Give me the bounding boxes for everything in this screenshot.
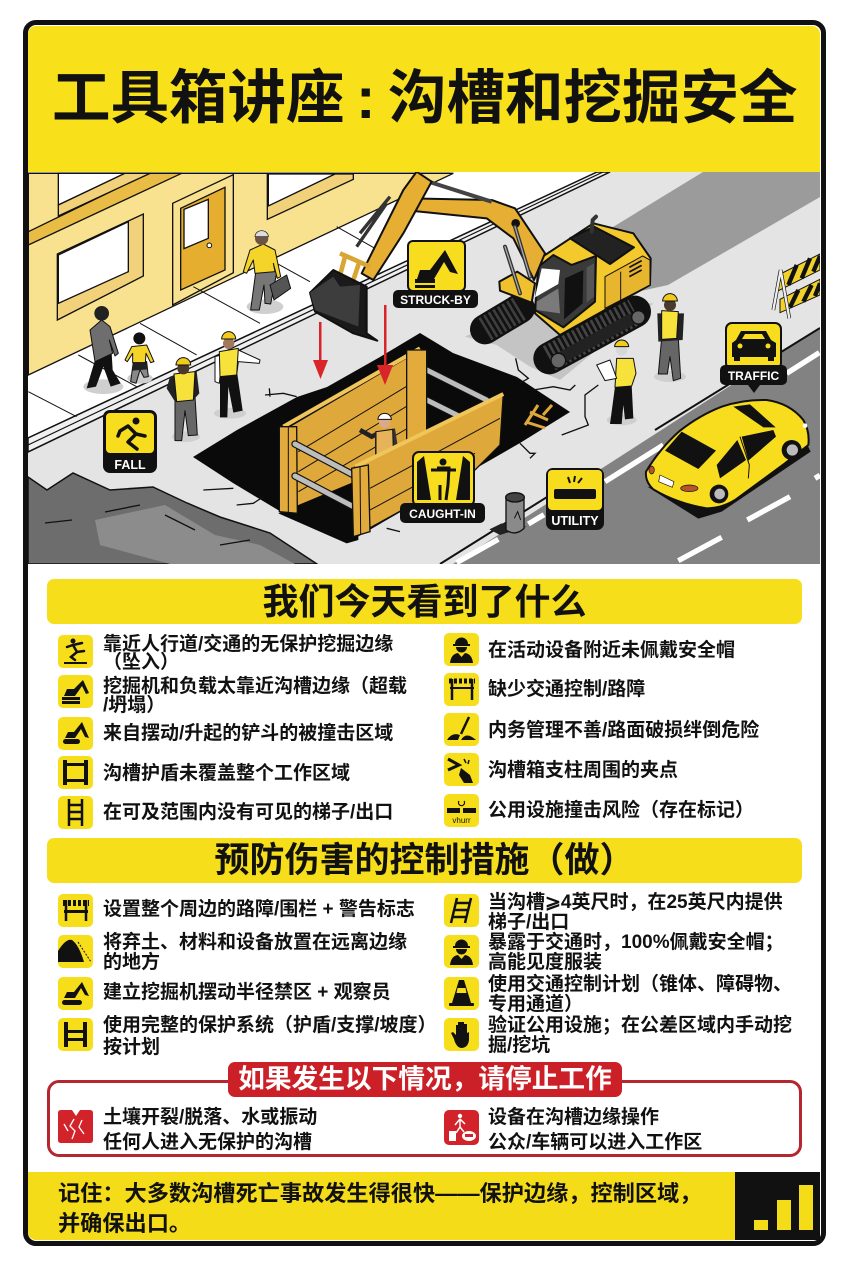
control item: protective system — [58, 1014, 437, 1058]
icon: spoil pile — [58, 935, 93, 968]
icon: excavator — [58, 675, 93, 708]
hazard item: no hard hat — [444, 633, 735, 666]
front corner post — [352, 465, 370, 537]
worker standing by road — [654, 294, 686, 382]
icon: signal bars logo — [735, 1172, 820, 1240]
text: 内务管理不善/路面破损绊倒危险 — [488, 720, 759, 741]
sidewalk — [28, 172, 600, 442]
icon: falling person — [58, 635, 93, 668]
excavator bucket — [310, 270, 377, 341]
hazard sign: struck-by: STRUCK-BY — [400, 293, 471, 307]
text: 按计划 — [103, 1037, 160, 1058]
road — [453, 328, 820, 564]
icon: barricade — [444, 673, 479, 706]
ground — [28, 172, 820, 564]
front wooden panel — [355, 393, 503, 533]
hazard sign: utility — [546, 468, 604, 530]
excavator arm — [362, 172, 432, 280]
steel struts left — [295, 444, 357, 508]
illustration: excavation site scene — [28, 172, 820, 564]
text — [488, 932, 784, 973]
pedestrians and workers — [83, 231, 291, 442]
worker pointing — [214, 332, 260, 419]
hazard item: no barricades — [444, 673, 645, 706]
text: 公众/车辆可以进入工作区 — [488, 1132, 702, 1153]
hazard item: housekeeping — [444, 713, 759, 746]
counterweight front — [499, 272, 535, 303]
icon: barricade — [58, 894, 93, 927]
ground cracks — [203, 388, 400, 532]
text: 沟槽护盾未覆盖整个工作区域 — [103, 763, 350, 784]
text: 任何人进入无保护的沟槽 — [103, 1132, 312, 1153]
icon: worker head — [444, 633, 479, 666]
steel struts right — [420, 367, 487, 417]
text: 在可及范围内没有可见的梯子/出口 — [103, 802, 393, 823]
hazard item: utility strike — [444, 794, 754, 827]
curb — [28, 172, 610, 452]
road barricade — [773, 254, 820, 318]
icon: person and car — [444, 1110, 479, 1145]
text: 高能见度服装 — [488, 952, 602, 973]
control item: spoil setback — [58, 932, 407, 973]
stop work heading: 如果发生以下情况，请停止工作 — [238, 1064, 612, 1094]
hazard sign: struck-by — [393, 240, 478, 308]
icon: utility pipe: vhurr — [452, 816, 471, 825]
text — [103, 932, 407, 973]
text: 专用通道） — [488, 994, 583, 1015]
icon: traffic cone — [444, 977, 479, 1010]
control item: swing radius — [58, 977, 391, 1010]
text: 靠近人行道/交通的无保护挖掘边缘 — [103, 634, 393, 655]
text: 暴露于交通时，100%佩戴安全帽； — [488, 932, 784, 953]
icon: excavator — [58, 717, 93, 750]
text: 将弃土、材料和设备放置在远离边缘 — [103, 932, 407, 953]
main boom — [410, 198, 545, 280]
hazard sign: fall: FALL — [114, 458, 146, 472]
hazard sign: traffic — [720, 323, 787, 393]
sidewalk joints — [28, 227, 387, 417]
hazard sign: caught-in — [400, 452, 485, 523]
text: 掘/挖坑 — [488, 1035, 550, 1056]
text: 设置整个周边的路障/围栏 + 警告标志 — [103, 899, 415, 920]
window top left — [58, 173, 125, 205]
trench ladder — [525, 405, 552, 428]
hazard item: no ladder — [58, 796, 393, 829]
control item: verify utilities — [444, 1018, 804, 1056]
icon: trench shield — [58, 756, 93, 789]
heading: what we saw today — [47, 579, 802, 624]
trench pit — [193, 333, 570, 543]
facade beam — [28, 173, 182, 245]
control item: hard hats — [444, 932, 784, 973]
rear track — [485, 308, 520, 329]
red warning arrows — [313, 305, 393, 385]
text: 缺少交通控制/路障 — [488, 679, 645, 700]
control item: barricades — [58, 894, 415, 927]
control item: ladder access — [444, 892, 783, 933]
text — [103, 634, 393, 673]
text: 当沟槽⩾4英尺时，在25英尺内提供 — [488, 892, 783, 913]
text: 来自摆动/升起的铲斗的被撞击区域 — [103, 723, 393, 744]
yellow taxi car — [646, 400, 811, 519]
manhole riser pipe — [489, 493, 527, 535]
road lane markings — [457, 353, 820, 563]
back wooden panel — [287, 350, 425, 513]
text: 使用完整的保护系统（护盾/支撑/坡度） — [103, 1015, 437, 1036]
icon: cracked soil — [58, 1107, 93, 1145]
reminder text: 记住：大多数沟槽死亡事故发生得很快——保护边缘，控制区域， — [58, 1181, 701, 1206]
excavator — [410, 180, 653, 380]
text: 建立挖掘机摆动半径禁区 + 观察员 — [103, 982, 391, 1003]
title banner — [28, 26, 820, 172]
text: 公用设施撞击风险（存在标记） — [488, 800, 754, 821]
window middle — [57, 214, 143, 320]
icon: excavator — [58, 977, 93, 1010]
text: 使用交通控制计划（锥体、障碍物、 — [488, 974, 792, 995]
soil pile — [28, 473, 317, 564]
hazard sign: traffic: TRAFFIC — [728, 369, 779, 383]
icon: worker head — [444, 935, 479, 968]
text: 设备在沟槽边缘操作 — [488, 1107, 659, 1128]
hazard sign: utility: UTILITY — [551, 514, 599, 528]
building facade — [28, 173, 453, 375]
reminder text — [58, 1179, 728, 1235]
hazard sign: caught-in: CAUGHT-IN — [409, 507, 476, 521]
text: 土壤开裂/脱落、水或振动 — [103, 1107, 317, 1128]
title text: 沟槽和挖掘安全 — [388, 66, 798, 131]
text: 验证公用设施；在公差区域内手动挖 — [488, 1015, 792, 1036]
footer reminder — [28, 1172, 735, 1240]
icon: shovel and debris — [444, 713, 479, 746]
far road strip — [600, 172, 820, 300]
text — [488, 975, 792, 1015]
text — [488, 892, 783, 933]
hazard item: struck-by zone — [58, 717, 393, 750]
worker with hands on hips — [167, 358, 200, 442]
text — [103, 1105, 317, 1155]
text: 在活动设备附近未佩戴安全帽 — [488, 640, 735, 661]
text: 的地方 — [103, 952, 160, 973]
worker with clipboard — [597, 340, 637, 425]
hazard item: excavator near edge — [58, 675, 407, 716]
icon: trench shield — [58, 1018, 93, 1051]
text — [488, 1016, 792, 1056]
stop conditions: soil and entry — [58, 1102, 398, 1152]
adult pedestrian — [83, 306, 123, 394]
door frame — [173, 175, 233, 305]
hazard item: unprotected edge — [58, 634, 393, 673]
title text: : — [356, 66, 375, 131]
text: （坠入） — [103, 652, 179, 673]
text — [488, 1105, 702, 1155]
left corner post — [279, 427, 297, 513]
hazard item: shield coverage — [58, 756, 350, 789]
icon: utility pipe — [444, 794, 479, 827]
stop conditions: equipment and public — [444, 1102, 784, 1152]
door — [181, 187, 225, 290]
control item: traffic plan — [444, 977, 804, 1015]
icon: hand — [444, 1018, 479, 1051]
hazard sign: fall — [103, 410, 157, 473]
window top right — [267, 174, 353, 219]
text — [103, 1014, 437, 1058]
heading: controls to prevent injury — [47, 838, 802, 883]
reminder text: 并确保出口。 — [58, 1211, 191, 1236]
cab — [535, 255, 596, 327]
excavator upper body — [535, 223, 651, 335]
text: 沟槽箱支柱周围的夹点 — [488, 760, 678, 781]
trench shoring box — [278, 348, 425, 543]
shadow — [465, 303, 653, 380]
heading: what we saw today: 我们今天看到了什么 — [262, 581, 586, 622]
icon: ladder — [444, 894, 479, 927]
pedestrian with briefcase — [243, 231, 291, 314]
title text: 工具箱讲座 — [52, 66, 345, 131]
text — [103, 676, 407, 716]
front track — [549, 312, 635, 358]
hazard item: pinch points — [444, 753, 678, 786]
icon: pinch hand — [444, 753, 479, 786]
heading: controls to prevent injury: 预防伤害的控制措施（做） — [214, 841, 634, 880]
exhaust — [592, 217, 596, 232]
text: /坍塌） — [103, 695, 165, 716]
panel: stop work — [47, 1080, 802, 1157]
icon: ladder — [58, 796, 93, 829]
worker in trench — [360, 413, 398, 462]
child pedestrian — [125, 332, 154, 384]
text: 挖掘机和负载太靠近沟槽边缘（超载 — [103, 676, 407, 697]
title text — [52, 66, 798, 131]
text: 梯子/出口 — [488, 912, 569, 933]
